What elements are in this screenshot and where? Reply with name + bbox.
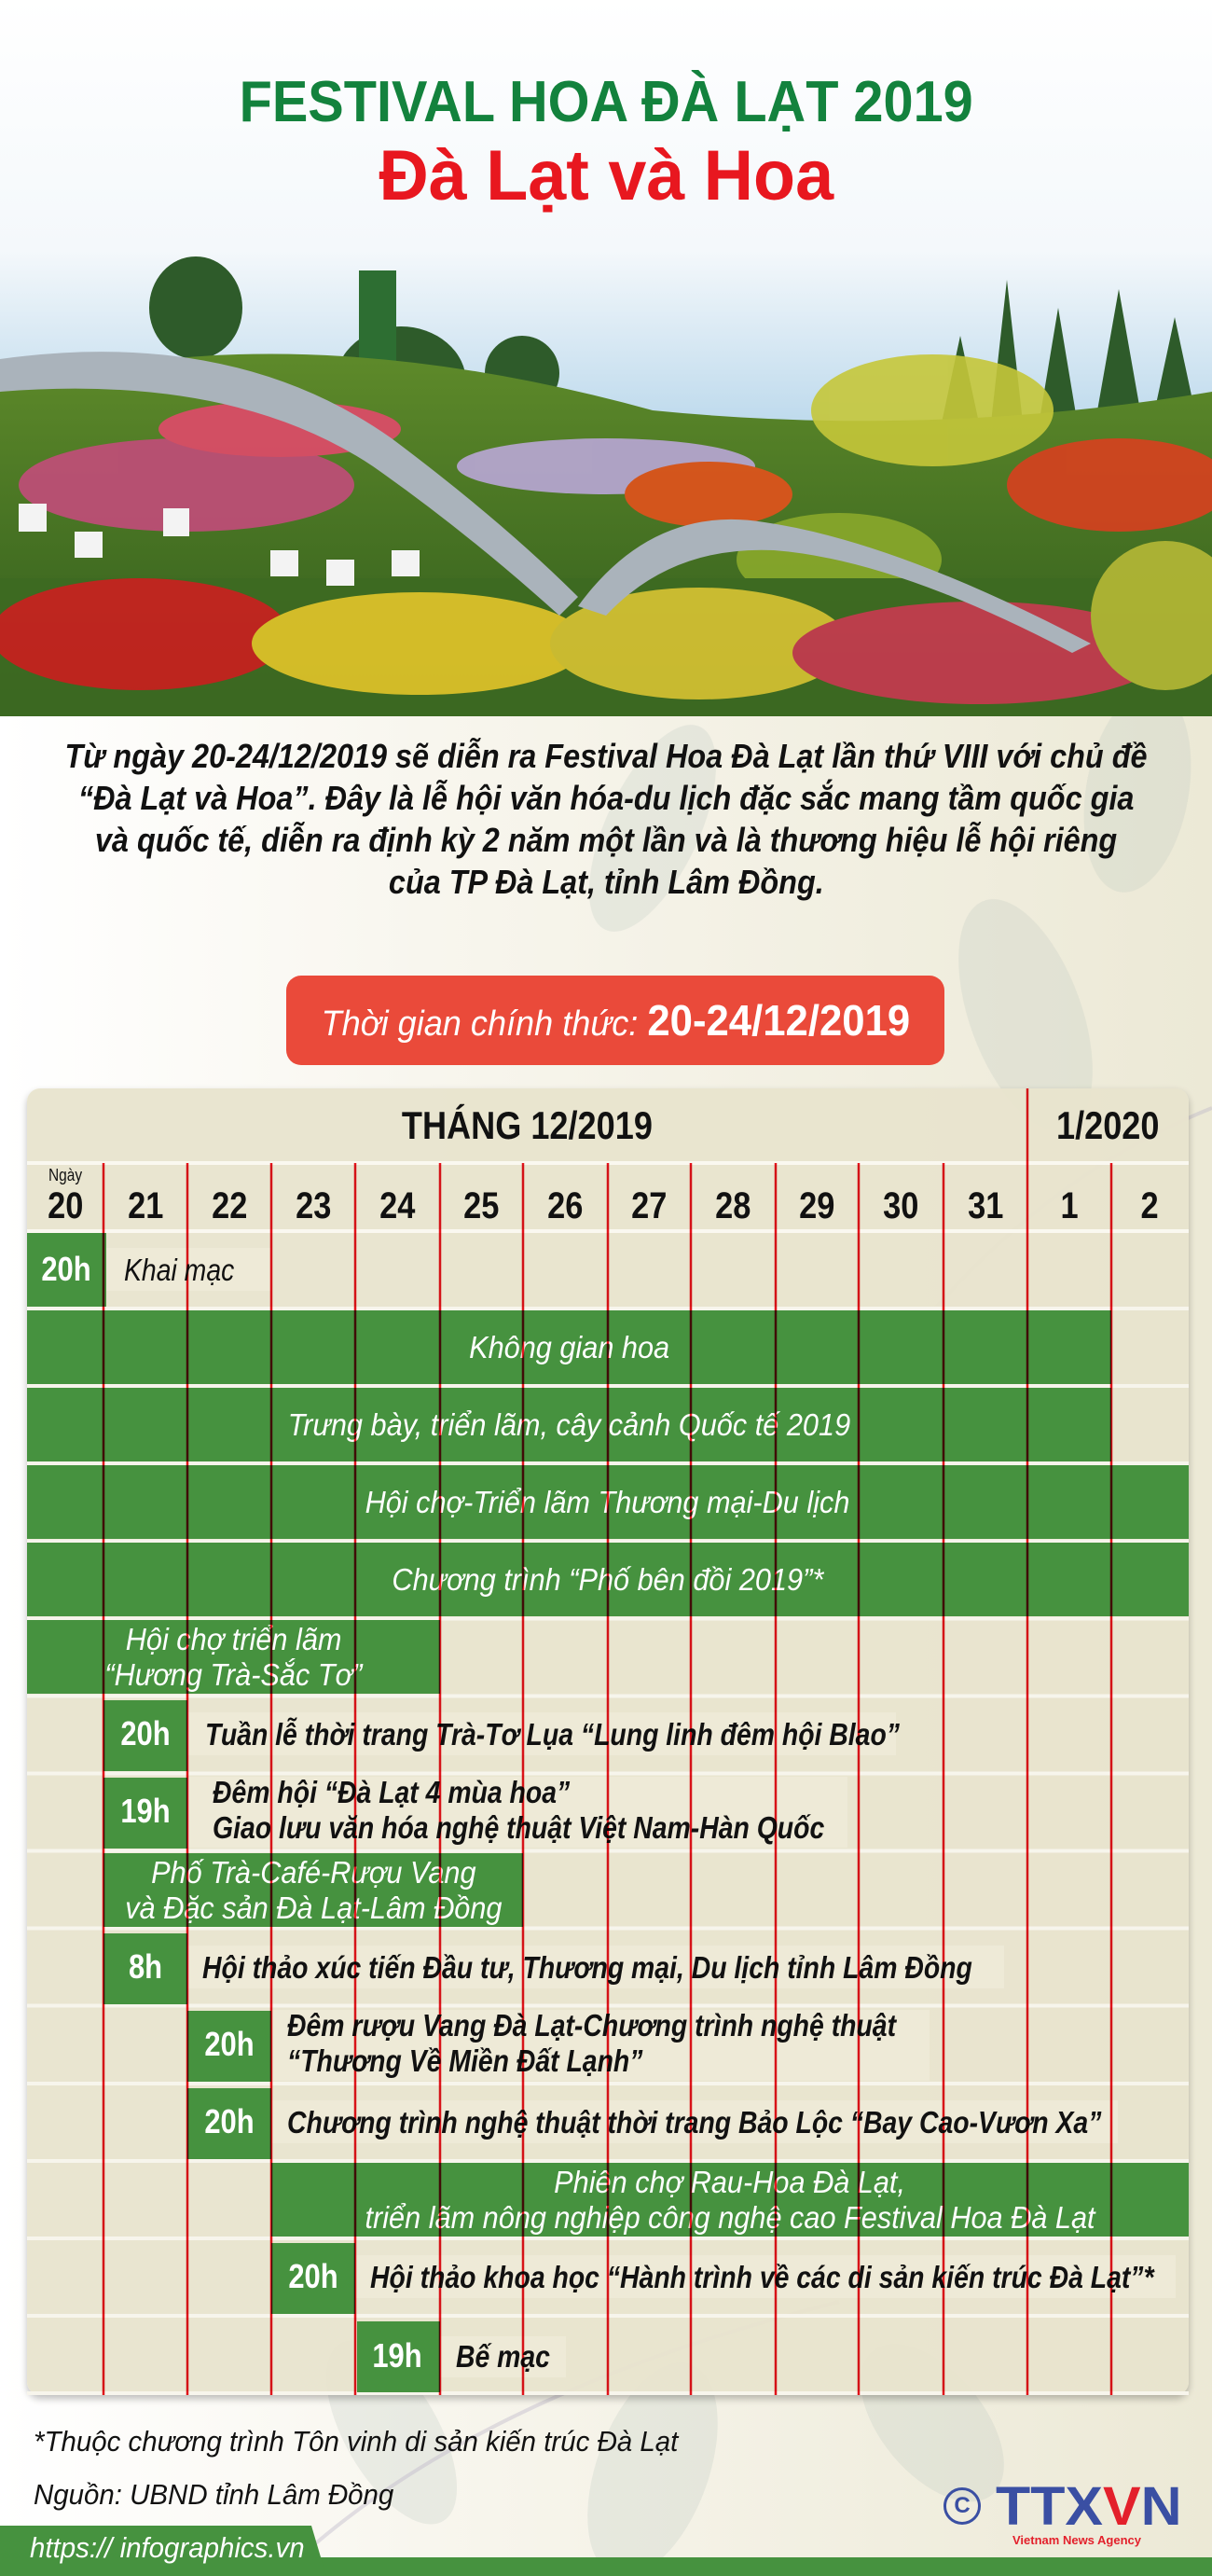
event: Bảo Lộc — [187, 2088, 1118, 2159]
day numbers row: Ngày — [48, 1166, 82, 1184]
day numbers row: 31 — [968, 1185, 1003, 1226]
event: Đêm hội Đà Lạt 4 mùa hoa: 19h — [120, 1792, 171, 1830]
event: Hội thảo xúc tiến — [103, 1933, 972, 2004]
event: Hội thảo xúc tiến: 8h — [129, 1947, 162, 1986]
event: Tuần lễ thời trang — [103, 1700, 900, 1771]
event: Đêm hội Đà Lạt 4 mùa hoa — [103, 1775, 824, 1849]
event: Hội thảo xúc tiến: Hội thảo xúc tiến Đầu tư, Thương mại, Du lịch tỉnh Lâm Đồng — [202, 1950, 972, 1985]
row separators — [27, 1233, 1189, 2395]
subtitle: Đà Lạt và Hoa — [379, 136, 833, 215]
event: Bảo Lộc: 20h — [204, 2102, 255, 2140]
event: Trưng bày — [27, 1388, 1111, 1461]
event: Bảo Lộc: Chương trình nghệ thuật thời trang Bảo Lộc “Bay Cao-Vươn Xa” — [287, 2105, 1101, 2140]
day numbers row: 23 — [296, 1185, 331, 1226]
day numbers row: 27 — [631, 1185, 668, 1226]
day numbers row — [48, 1166, 1159, 1226]
day numbers row: 29 — [799, 1185, 835, 1226]
schedule table — [27, 1088, 1189, 2395]
intro paragraph: “Đà Lạt và Hoa”. Đây là lễ hội văn hóa-du lịch đặc sắc mang tầm quốc gia — [78, 779, 1134, 817]
event: Hội chợ-Triển lãm: Hội chợ-Triển lãm Thương mại-Du lịch — [365, 1485, 850, 1519]
event: Tuần lễ thời trang: Tuần lễ thời trang Trà-Tơ Lụa “Lung linh đêm hội Blao” — [205, 1717, 900, 1752]
event: Phố Trà-Café-Rượu Vang — [103, 1853, 523, 1927]
event: Hội chợ-Triển lãm — [27, 1465, 1189, 1539]
intro paragraph: và quốc tế, diễn ra định kỳ 2 năm một lần và là thương hiệu lễ hội riêng — [95, 821, 1117, 859]
event: Hương Trà-Sắc Tơ: “Hương Trà-Sắc Tơ” — [105, 1657, 362, 1692]
event: Khai mạc — [27, 1233, 234, 1307]
background: leafy beige lower section — [0, 716, 1212, 2576]
day numbers row: 1 — [1060, 1185, 1079, 1226]
event: Hội thảo khoa học: Hội thảo khoa học “Hành trình về các di sản kiến trúc Đà Lạt”* — [370, 2260, 1154, 2294]
month header: THÁNG 12/2019 — [402, 1103, 653, 1147]
source: Nguồn: UBND tỉnh Lâm Đồng — [34, 2478, 393, 2511]
event: Phố bên đồi — [27, 1543, 1189, 1616]
event: Phố Trà-Café-Rượu Vang: Phố Trà-Café-Rượu Vang — [151, 1855, 475, 1890]
event: Phiên chợ Rau-Hoa — [271, 2163, 1189, 2237]
event: Phiên chợ Rau-Hoa: Phiên chợ Rau-Hoa Đà Lạt, — [555, 2165, 905, 2199]
event: Đêm rượu Vang: “Thương Về Miền Đất Lạnh” — [287, 2043, 642, 2078]
day numbers row: 26 — [547, 1185, 584, 1226]
intro paragraph: Từ ngày 20-24/12/2019 sẽ diễn ra Festival Hoa Đà Lạt lần thứ VIII với chủ đề — [64, 737, 1148, 775]
event: Bế mạc: 19h — [373, 2336, 422, 2375]
logo: TTXVN: C — [954, 2493, 971, 2518]
event: Hội thảo khoa học: 20h — [288, 2257, 338, 2295]
event: Tuần lễ thời trang: 20h — [120, 1714, 171, 1752]
month header 2020: 1/2020 — [1056, 1103, 1160, 1147]
event: Hương Trà-Sắc Tơ — [27, 1620, 440, 1694]
event: Không gian hoa: Không gian hoa — [469, 1330, 669, 1364]
logo: TTXVN — [943, 2476, 1182, 2547]
footer band with url — [0, 2526, 1212, 2576]
event: Bế mạc — [357, 2321, 550, 2392]
event: Đêm rượu Vang — [187, 2008, 897, 2082]
event: Hương Trà-Sắc Tơ: Hội chợ triển lãm — [126, 1622, 341, 1656]
hero photo: flower garden — [0, 184, 1212, 716]
red column grid lines — [103, 1088, 1113, 2395]
day numbers row: 30 — [883, 1185, 919, 1226]
event: Phố Trà-Café-Rượu Vang: và Đặc sản Đà Lạt-Lâm Đồng — [125, 1890, 502, 1925]
footnote: *Thuộc chương trình Tôn vinh di sản kiến trúc Đà Lạt — [34, 2425, 678, 2458]
event: Bế mạc: Bế mạc — [456, 2339, 550, 2374]
day numbers row: 22 — [212, 1185, 247, 1226]
official time pill — [286, 976, 944, 1065]
event: Không gian hoa — [27, 1310, 1111, 1384]
event: Khai mạc: Khai mạc — [124, 1253, 234, 1287]
event: Đêm rượu Vang: Đêm rượu Vang Đà Lạt-Chương trình nghệ thuật — [287, 2008, 896, 2043]
day numbers row: 20 — [48, 1185, 83, 1226]
event: Hội thảo khoa học — [271, 2243, 1176, 2314]
intro paragraph — [64, 737, 1148, 901]
event: Đêm hội Đà Lạt 4 mùa hoa: Đêm hội “Đà Lạt 4 mùa hoa” — [213, 1775, 570, 1809]
event: Khai mạc: 20h — [42, 1250, 91, 1288]
day numbers row: 28 — [715, 1185, 751, 1226]
day numbers row: 25 — [463, 1185, 500, 1226]
event: Phố bên đồi: Chương trình “Phố bên đồi 2019”* — [393, 1562, 823, 1597]
day numbers row: 21 — [128, 1185, 163, 1226]
intro paragraph: của TP Đà Lạt, tỉnh Lâm Đồng. — [389, 863, 823, 901]
logo: TTXVN: Vietnam News Agency — [1012, 2533, 1141, 2547]
event: Phiên chợ Rau-Hoa: triển lãm nông nghiệp công nghệ cao Festival Hoa Đà Lạt — [365, 2200, 1095, 2235]
event: Đêm hội Đà Lạt 4 mùa hoa: Giao lưu văn hóa nghệ thuật Việt Nam-Hàn Quốc — [213, 1810, 824, 1845]
official time pill: Thời gian chính thức: 20-24/12/2019 — [321, 996, 910, 1045]
logo: TTXVN: TTXVN — [996, 2476, 1182, 2537]
event: Đêm rượu Vang: 20h — [204, 2025, 255, 2063]
day numbers row: 2 — [1141, 1185, 1159, 1226]
title: FESTIVAL HOA ĐÀ LẠT 2019 — [239, 70, 973, 134]
event: Trưng bày: Trưng bày, triển lãm, cây cảnh Quốc tế 2019 — [288, 1407, 850, 1442]
footer band with url: https:// infographics.vn — [30, 2531, 305, 2564]
day numbers row: 24 — [379, 1185, 416, 1226]
